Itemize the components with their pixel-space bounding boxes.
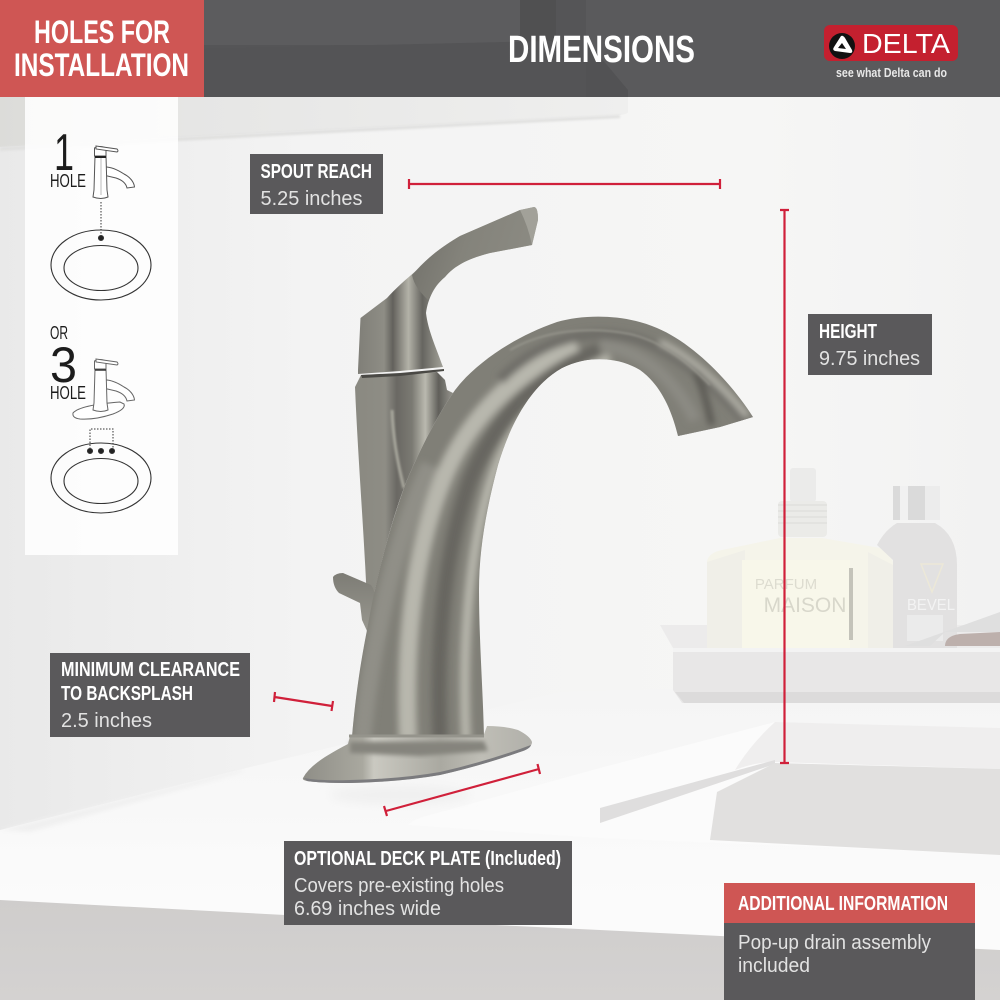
holes heading: INSTALLATION <box>14 47 189 83</box>
label: height: HEIGHT <box>819 321 877 343</box>
faucet rear body <box>355 372 453 625</box>
three hole option <box>50 323 151 513</box>
one hole option: 1 <box>54 124 74 182</box>
glass bottle <box>707 468 893 648</box>
holes heading <box>0 0 204 97</box>
arrow: clearance <box>274 692 333 711</box>
arrow: height <box>780 210 789 763</box>
faucet handle <box>358 207 538 378</box>
icon: faucet <box>93 146 134 198</box>
three hole option: OR <box>50 323 68 343</box>
label: height: 9.75 inches <box>819 348 920 370</box>
holes heading: HOLES FOR <box>34 14 170 50</box>
three hole option: 3 <box>50 337 77 393</box>
label: optional deck plate <box>284 841 572 925</box>
label: optional deck plate: OPTIONAL DECK PLATE (Included) <box>294 848 561 870</box>
label: minimum clearance: TO BACKSPLASH <box>61 683 193 705</box>
label: optional deck plate: 6.69 inches wide <box>294 898 441 920</box>
logo: Delta: DELTA <box>862 28 950 59</box>
tray <box>660 625 1000 703</box>
dotted bracket <box>90 429 113 449</box>
label: height <box>808 314 932 375</box>
icon: delta mark <box>829 33 855 59</box>
panel: hole options <box>25 97 178 555</box>
panel: additional information: included <box>738 955 810 977</box>
glass bottle: PARFUM <box>755 576 817 593</box>
grey bottle <box>877 486 957 648</box>
logo: Delta: see what Delta can do <box>836 66 947 80</box>
label: minimum clearance: 2.5 inches <box>61 710 152 732</box>
panel: additional information: ADDITIONAL INFORMATION <box>738 893 948 915</box>
grey bottle: BEVEL <box>907 597 955 614</box>
faucet <box>303 207 770 783</box>
deck plate <box>303 726 532 783</box>
icon: sink oval <box>51 230 151 300</box>
panel: additional information <box>724 883 975 1000</box>
title: DIMENSIONS <box>508 29 695 71</box>
drain lever <box>333 573 375 631</box>
logo: Delta <box>824 25 958 80</box>
arrow: spout reach <box>409 179 720 189</box>
label: spout reach: 5.25 inches <box>260 188 362 210</box>
one hole option <box>50 124 151 300</box>
faucet spout <box>352 316 753 734</box>
label: spout reach <box>250 154 383 214</box>
icon: faucet with plate <box>73 359 134 419</box>
one hole option: HOLE <box>50 171 86 191</box>
panel: additional information: Pop-up drain assembly <box>738 932 931 954</box>
label: minimum clearance <box>50 653 250 737</box>
glass bottle: MAISON <box>764 594 846 617</box>
label: spout reach: SPOUT REACH <box>260 161 372 183</box>
dotted connector <box>100 202 102 236</box>
tube <box>905 612 1000 646</box>
label: optional deck plate: Covers pre-existing holes <box>294 875 504 897</box>
bottles on tray <box>660 468 1000 703</box>
arrow: deck plate width <box>384 764 540 816</box>
header bar <box>204 0 1000 97</box>
three hole option: HOLE <box>50 383 86 403</box>
label: minimum clearance: MINIMUM CLEARANCE <box>61 659 240 681</box>
icon: sink oval with three holes <box>51 443 151 513</box>
